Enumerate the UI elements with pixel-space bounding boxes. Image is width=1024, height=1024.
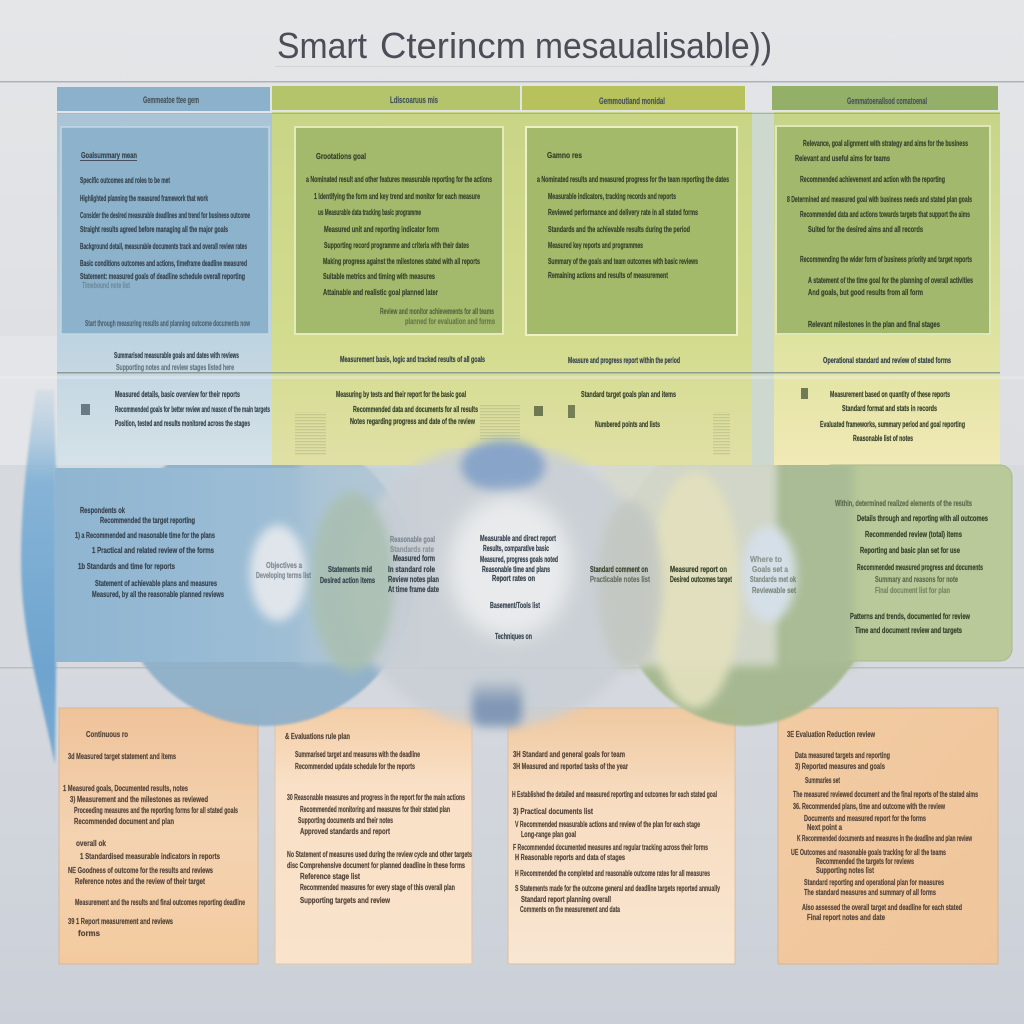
panel: green criteria one: Review and monitor achievements for all teams bbox=[380, 307, 494, 316]
text block: venn left labels: Desired action items bbox=[320, 576, 375, 585]
text block: venn left labels: Developing terms list bbox=[256, 571, 311, 580]
peach card three: 3) Practical documents list bbox=[513, 807, 593, 816]
text block: left detail row: Position, tested and results monitored across the stages bbox=[115, 419, 250, 428]
text block: green band: Patterns and trends, documented for review bbox=[850, 612, 971, 621]
peach card two: & Evaluations rule plan bbox=[285, 732, 350, 741]
panel: green criteria two: Reviewed performance and delivery rate in all stated forms bbox=[548, 208, 698, 217]
header bar: olive: Gemmoutiand monidal bbox=[599, 96, 665, 106]
text block: blue band: Measured, by all the reasonable planned reviews bbox=[92, 590, 224, 599]
header bar: olive bbox=[522, 86, 745, 110]
panel: blue criteria: Start through measuring results and planning outcome documents now bbox=[85, 319, 250, 328]
peach card one: NE Goodness of outcome for the results and reviews bbox=[68, 866, 213, 875]
panel: green criteria three: Suited for the desired aims and all records bbox=[808, 225, 923, 234]
icons: paired middle glyphs bbox=[534, 405, 575, 418]
peach card one: 3d Measured target statement and items bbox=[68, 752, 176, 761]
peach card two: Recommended measures for every stage of this overall plan bbox=[300, 883, 455, 892]
summary row text: Measure and progress report within the period bbox=[568, 356, 680, 365]
peach card three: V Recommended measurable actions and review of the plan for each stage bbox=[515, 820, 700, 829]
text block: blue band: 1) a Recommended and reasonable time for the plans bbox=[75, 531, 215, 540]
text block: middle detail row: Standard target goals plan and items bbox=[581, 390, 676, 399]
text block: green band: Time and document review and targets bbox=[855, 626, 962, 635]
panel: green criteria two: Remaining actions and results of measurement bbox=[548, 271, 668, 280]
text block: venn right labels: Goals set a bbox=[752, 565, 788, 574]
panel: blue criteria: Straight results agreed before managing all the major goals bbox=[80, 225, 228, 234]
text block: left detail row bbox=[81, 390, 270, 428]
text block: venn left labels: At time frame date bbox=[388, 585, 439, 594]
panel: blue criteria: Timebound note list bbox=[82, 281, 130, 290]
title: Cterincm bbox=[380, 25, 526, 66]
text block: venn right labels: Reviewable set bbox=[752, 586, 796, 595]
panel: green criteria one: Measured unit and reporting indicator form bbox=[324, 225, 439, 234]
peach card four: Next point a bbox=[807, 823, 842, 832]
panel: blue criteria: Goalsummary mean bbox=[81, 151, 137, 160]
text block: blue band: Respondents ok bbox=[80, 506, 125, 515]
text block: green band: Reporting and basic plan set for use bbox=[860, 546, 960, 555]
peach card one: Proceeding measures and the reporting forms for all stated goals bbox=[74, 806, 238, 815]
row divider bbox=[57, 372, 1000, 374]
striped blocks bbox=[295, 404, 730, 456]
text block: venn left labels: Statements mid bbox=[328, 565, 372, 574]
peach card four: Data measured targets and reporting bbox=[795, 751, 890, 760]
text block: venn left labels: Measured form bbox=[393, 554, 435, 563]
peach card three: H Reasonable reports and data of stages bbox=[515, 853, 625, 862]
peach card four: The standard measures and summary of all forms bbox=[804, 888, 936, 897]
text block: venn left labels bbox=[256, 535, 439, 594]
panel: green criteria three: And goals, but good results from all form bbox=[808, 288, 923, 297]
peach card three: H Recommended the completed and reasonable outcome rates for all measures bbox=[515, 869, 710, 878]
peach card one bbox=[59, 708, 258, 964]
summary row text: Operational standard and review of stated forms bbox=[823, 356, 951, 365]
panel: green criteria one bbox=[295, 127, 503, 334]
text block: blue band: 1b Standards and time for reports bbox=[78, 562, 175, 571]
title: Smart bbox=[277, 25, 367, 66]
summary row text: Summarised measurable goals and dates with reviews bbox=[114, 351, 239, 360]
panel: blue criteria: Background detail, measurable documents track and overall review rates bbox=[80, 242, 247, 251]
panel: blue criteria: Highlighted planning the measured framework that work bbox=[80, 194, 208, 203]
text block: venn centre: Results, comparative basic bbox=[483, 544, 549, 553]
summary row text bbox=[114, 351, 951, 372]
text block: venn left labels: Objectives a bbox=[266, 561, 302, 570]
text block: venn centre: Basement/Tools list bbox=[490, 601, 540, 610]
peach card one: forms bbox=[78, 929, 101, 938]
peach card four: Recommended the targets for reviews bbox=[816, 857, 914, 866]
header bar: blue: Gemmeatoe ttee gem bbox=[143, 95, 199, 105]
text block: venn centre: Reasonable time and plans bbox=[482, 565, 550, 574]
panel: right green band bbox=[820, 465, 1012, 661]
panel: green criteria one: Supporting record programme and criteria with their dates bbox=[324, 241, 469, 250]
peach card four: Supporting notes list bbox=[816, 866, 874, 875]
peach card one: overall ok bbox=[76, 839, 106, 848]
band: background bbox=[0, 465, 1024, 668]
header bar: green: Ldiscoaruus mis bbox=[390, 95, 438, 105]
panel: green criteria three: Recommended achievement and action with the reporting bbox=[800, 175, 945, 184]
header bar: green bbox=[272, 86, 520, 110]
text block: venn right labels: Desired outcomes target bbox=[670, 575, 732, 584]
peach card two: Summarised target and measures with the deadline bbox=[295, 750, 420, 759]
text block: left detail row: Measured details, basic overview for their reports bbox=[115, 390, 240, 399]
summary row text: Supporting notes and review stages listed here bbox=[116, 363, 234, 372]
text block: green band: Summary and reasons for note bbox=[875, 575, 958, 584]
header bar: right green: Gemmatoenalisod comatoenal bbox=[847, 96, 927, 106]
panel: green criteria three bbox=[776, 126, 990, 334]
panel: green criteria one: Attainable and realistic goal planned later bbox=[323, 288, 438, 297]
panel: green criteria two: Measurable indicators, tracking records and reports bbox=[548, 192, 676, 201]
peach card one: Reference notes and the review of their target bbox=[75, 877, 205, 886]
text block: venn right labels: Standard comment on bbox=[590, 565, 648, 574]
text block: venn right labels: Practicable notes list bbox=[590, 575, 650, 584]
peach card four: 3) Reported measures and goals bbox=[795, 762, 885, 771]
panel: left blue band bbox=[55, 468, 405, 662]
text block: blue band: Recommended the target reporting bbox=[100, 516, 195, 525]
peach card four: Final report notes and date bbox=[807, 913, 885, 922]
peach card three bbox=[508, 708, 735, 964]
peach card two: No Statement of measures used during the review cycle and other targets bbox=[287, 850, 472, 859]
panel: blue criteria: Specific outcomes and roles to be met bbox=[80, 176, 170, 185]
peach card three: Standard report planning overall bbox=[521, 895, 611, 904]
peach card two: Approved standards and report bbox=[300, 827, 390, 836]
panel: green criteria two: a Nominated results and measured progress for the team reporting the dates bbox=[537, 175, 729, 184]
panel: green criteria one: planned for evaluation and forms bbox=[405, 317, 495, 326]
title: mesaualisable)) bbox=[535, 25, 772, 66]
text block: venn centre bbox=[480, 534, 558, 641]
peach card three: H Established the detailed and measured reporting and outcomes for each stated goal bbox=[512, 790, 717, 799]
panel: green criteria two: Summary of the goals and team outcomes with basic reviews bbox=[548, 257, 698, 266]
peach card three: 3H Standard and general goals for team bbox=[513, 750, 625, 759]
panel: blue criteria bbox=[61, 127, 269, 334]
text block: green band: Recommended review (total) items bbox=[865, 530, 962, 539]
text block: venn right labels bbox=[590, 555, 796, 595]
panel: green criteria three: Relevant milestones in the plan and final stages bbox=[808, 320, 940, 329]
peach card one: 1 Measured goals, Documented results, notes bbox=[63, 784, 188, 793]
peach card three: 3H Measured and reported tasks of the year bbox=[513, 762, 628, 771]
text block: blue band bbox=[75, 506, 224, 599]
text block: venn right labels: Where to bbox=[750, 555, 782, 564]
peach card one: Recommended document and plan bbox=[74, 817, 174, 826]
summary row text: Measurement basis, logic and tracked results of all goals bbox=[340, 355, 485, 364]
text block: right detail row: Reasonable list of notes bbox=[853, 434, 913, 443]
panel: green criteria two: Gamno res bbox=[547, 151, 582, 160]
text block: venn left labels: Standards rate bbox=[390, 545, 434, 554]
text block: blue band: 1 Practical and related review of the forms bbox=[92, 546, 214, 555]
text block: green band: Within, determined realized elements of the results bbox=[835, 499, 972, 508]
panel: blue criteria: Basic conditions outcomes and actions, timeframe deadline measured bbox=[80, 259, 247, 268]
peach card four bbox=[778, 708, 998, 964]
peach card three: Comments on the measurement and data bbox=[520, 905, 620, 914]
peach card one: 1 Standardised measurable indicators in reports bbox=[80, 852, 220, 861]
panel: green criteria one: Making progress against the milestones stated with all reports bbox=[323, 257, 480, 266]
peach card two: Supporting targets and review bbox=[300, 896, 391, 905]
peach card four: Standard reporting and operational plan for measures bbox=[804, 878, 944, 887]
text block: venn centre: Techniques on bbox=[495, 632, 532, 641]
text block: venn right labels: Measured report on bbox=[670, 565, 727, 574]
peach card one: 39 1 Report measurement and reviews bbox=[68, 917, 173, 926]
peach card two: Reference stage list bbox=[300, 872, 360, 881]
text block: venn left labels: In standard role bbox=[388, 565, 435, 574]
text block: venn right labels: Standards met ok bbox=[750, 575, 796, 584]
text block: blue band: Statement of achievable plans and measures bbox=[95, 579, 217, 588]
panel: blue criteria: Consider the desired measurable deadlines and trend for business outcome bbox=[80, 211, 250, 220]
panel: green criteria two bbox=[526, 127, 737, 335]
venn diagram lobes bbox=[55, 428, 1012, 727]
text block: right detail row bbox=[801, 388, 965, 443]
text block: venn centre: Measured, progress goals noted bbox=[480, 555, 558, 564]
peach card two: Recommended update schedule for the reports bbox=[295, 762, 415, 771]
panel: green criteria two: Measured key reports and programmes bbox=[548, 241, 643, 250]
text block: venn left labels: Review notes plan bbox=[388, 575, 439, 584]
peach card four: Documents and measured report for the forms bbox=[804, 814, 926, 823]
text block: middle detail row: Recommended data and documents for all results bbox=[353, 405, 478, 414]
peach card three: Long-range plan goal bbox=[521, 830, 576, 839]
icon: small document right bbox=[801, 388, 808, 399]
column backgrounds bbox=[0, 112, 1000, 466]
panel: green criteria one: 1 Identifying the form and key trend and monitor for each measure bbox=[314, 192, 480, 201]
text block: left detail row: Recommended goals for better review and reason of the main targets bbox=[115, 405, 270, 414]
header bar: right green bbox=[772, 86, 998, 110]
text block: venn left labels: Reasonable goal bbox=[390, 535, 435, 544]
icon: left curved strip bbox=[21, 390, 56, 765]
text block: green band: Final document list for plan bbox=[875, 586, 950, 595]
peach card four: 36. Recommended plans, time and outcome with the review bbox=[793, 802, 946, 811]
peach card four: 3E Evaluation Reduction review bbox=[787, 730, 876, 739]
text block: middle detail row bbox=[336, 390, 676, 429]
text block: green band bbox=[835, 499, 988, 635]
peach card one: Measurement and the results and final outcomes reporting deadline bbox=[75, 898, 245, 907]
panel: green criteria two: Standards and the achievable results during the period bbox=[548, 225, 690, 234]
peach card four: UE Outcomes and reasonable goals tracking for all the teams bbox=[791, 848, 946, 857]
text block: right detail row: Standard format and stats in records bbox=[842, 404, 937, 413]
peach card four: Summaries set bbox=[805, 776, 840, 785]
icon: small document left bbox=[81, 404, 90, 415]
text block: middle detail row: Notes regarding progress and date of the review bbox=[350, 417, 476, 426]
panel: green criteria one: Suitable metrics and timing with measures bbox=[323, 272, 435, 281]
title bbox=[275, 25, 772, 67]
peach card two: disc Comprehensive document for planned deadline in these forms bbox=[287, 861, 465, 870]
peach card three: F Recommended documented measures and regular tracking across their forms bbox=[513, 843, 708, 852]
peach card two: Supporting documents and their notes bbox=[298, 816, 393, 825]
header bar: blue bbox=[57, 87, 270, 111]
panel: green criteria one: us Measurable data tracking basic programme bbox=[318, 208, 421, 217]
panel: green criteria one: Grootations goal bbox=[316, 152, 366, 161]
text block: venn centre: Report rates on bbox=[492, 574, 535, 583]
peach card three: S Statements made for the outcome general and deadline targets reported annually bbox=[515, 884, 720, 893]
panel: blue criteria: Statement: measured goals of deadline schedule overall reporting bbox=[80, 272, 245, 281]
peach card two bbox=[275, 708, 472, 964]
panel: green criteria three: Relevant and useful aims for teams bbox=[795, 154, 890, 163]
text block: middle detail row: Measuring by tests and their report for the basic goal bbox=[336, 390, 466, 399]
text block: right detail row: Measurement based on quantity of these reports bbox=[830, 390, 950, 399]
text block: venn centre: Measurable and direct report bbox=[480, 534, 556, 543]
peach card two: 30 Reasonable measures and progress in the report for the main actions bbox=[287, 793, 465, 802]
panel: green criteria one: a Nominated result and other features measurable reporting for the actions bbox=[306, 175, 492, 184]
peach card one: 3) Measurement and the milestones as reviewed bbox=[70, 795, 208, 804]
peach card one: Continuous ro bbox=[86, 730, 128, 739]
peach card two: Recommended monitoring and measures for their stated plan bbox=[300, 805, 450, 814]
text block: middle detail row: Numbered points and lists bbox=[595, 420, 660, 429]
